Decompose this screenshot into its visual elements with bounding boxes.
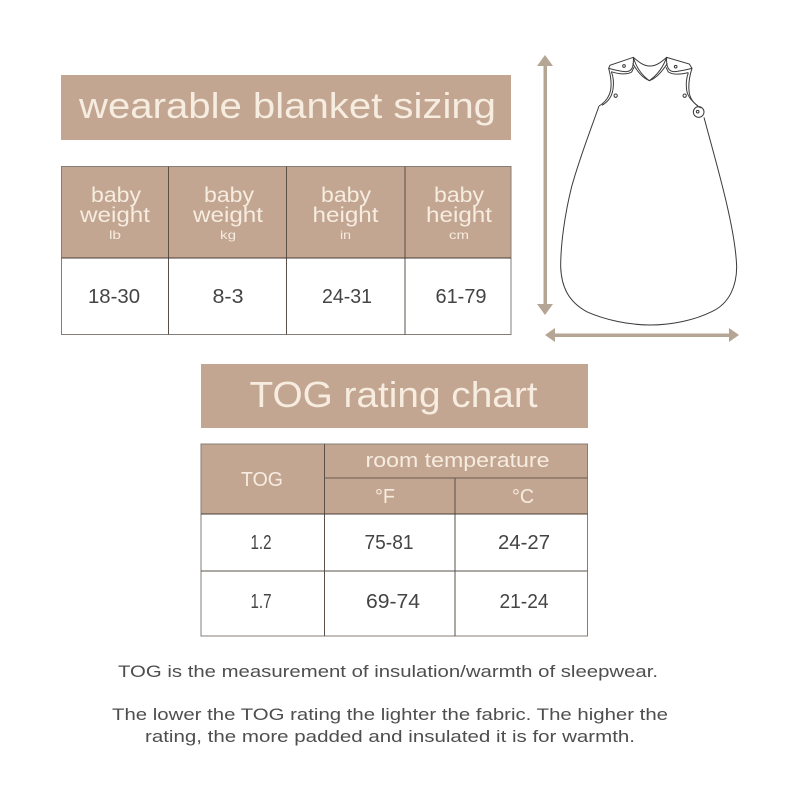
sizing table header: weight bbox=[192, 204, 263, 227]
sizing table values: 61-79 bbox=[436, 286, 486, 308]
TOG table header: room temperature bbox=[366, 450, 550, 472]
TOG table header: °C bbox=[512, 486, 534, 508]
text: TOG explanation: TOG is the measurement of insulation/warmth of sleepwear. bbox=[118, 662, 658, 681]
title: wearable blanket sizing bbox=[61, 75, 511, 140]
arrow: horizontal width bbox=[545, 328, 739, 342]
sizing table values: 8-3 bbox=[212, 286, 244, 308]
text: TOG explanation bbox=[112, 662, 668, 746]
sizing table header bbox=[62, 166, 511, 258]
sizing table header: baby bbox=[434, 184, 485, 207]
TOG table header: TOG bbox=[241, 469, 283, 491]
arrow: vertical height bbox=[537, 55, 553, 315]
icon: sleep sack outline bbox=[561, 57, 737, 325]
title: TOG rating chart bbox=[201, 364, 588, 428]
TOG table grid bbox=[201, 444, 588, 636]
sizing table header: baby bbox=[204, 184, 255, 207]
sizing table header: weight bbox=[79, 204, 150, 227]
sizing table grid bbox=[62, 166, 511, 334]
sizing table header: height bbox=[426, 204, 492, 227]
text: TOG explanation: rating, the more padded and insulated it is for warmth. bbox=[145, 727, 635, 746]
TOG table values: 21-24 bbox=[500, 591, 548, 613]
TOG table header bbox=[201, 444, 588, 514]
sizing table values: 24-31 bbox=[322, 286, 372, 308]
sizing table header: kg bbox=[220, 228, 236, 242]
TOG table values: 75-81 bbox=[364, 532, 414, 554]
TOG table values: 24-27 bbox=[498, 532, 550, 554]
TOG table values: 1.2 bbox=[250, 532, 272, 554]
sizing table header: cm bbox=[449, 228, 469, 242]
sizing table bbox=[62, 166, 511, 334]
TOG table bbox=[201, 444, 588, 636]
TOG table values: 1.7 bbox=[250, 591, 272, 613]
sizing table values: 18-30 bbox=[88, 286, 140, 308]
sizing table header: baby bbox=[91, 184, 142, 207]
title: TOG rating chart: TOG rating chart bbox=[250, 374, 538, 415]
sizing table header: in bbox=[340, 228, 351, 242]
title: wearable blanket sizing: wearable blanket sizing bbox=[78, 85, 496, 126]
sizing table header: baby bbox=[321, 184, 372, 207]
TOG table header: °F bbox=[375, 486, 395, 508]
TOG table values: 69-74 bbox=[366, 591, 420, 613]
sizing table values bbox=[88, 286, 486, 308]
text: TOG explanation: The lower the TOG rating the lighter the fabric. The higher the bbox=[112, 705, 668, 724]
TOG table values bbox=[250, 532, 550, 613]
sizing table header: height bbox=[312, 204, 379, 227]
sizing table header: lb bbox=[109, 228, 121, 242]
